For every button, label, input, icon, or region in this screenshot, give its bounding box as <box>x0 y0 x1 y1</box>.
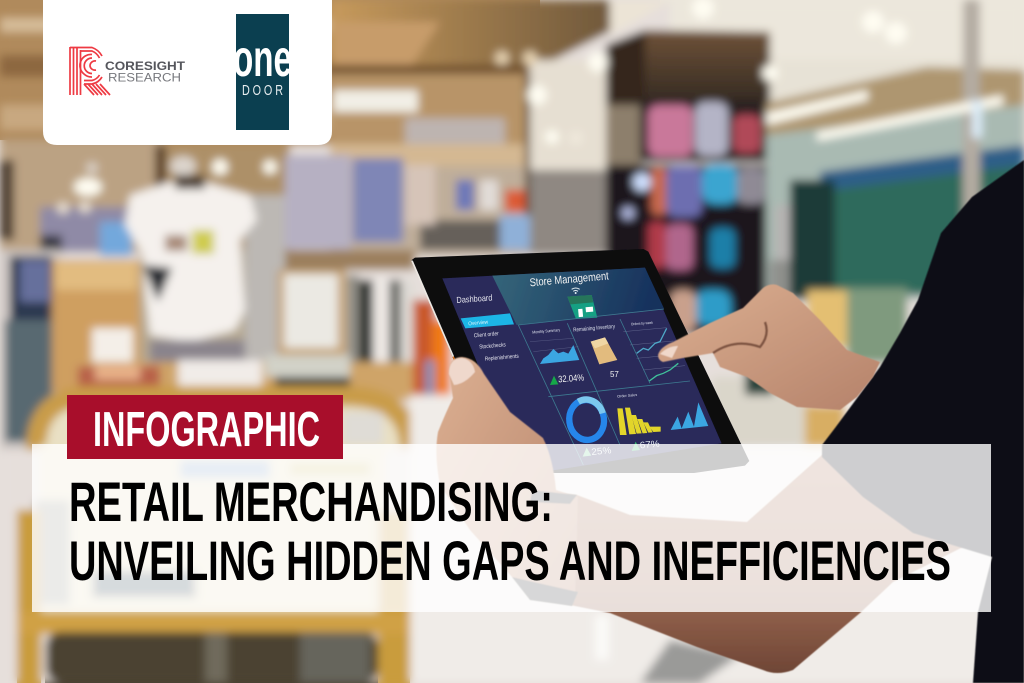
lower stats <box>583 439 660 457</box>
finger crease <box>713 322 767 353</box>
donut chart <box>567 398 607 442</box>
sidebar menu: Dashboard <box>456 292 493 305</box>
person: forearm and upper arm <box>535 440 992 673</box>
panel labels: Monthly Summary <box>532 327 560 335</box>
logo card <box>43 0 332 145</box>
left hand holding tablet <box>436 357 578 606</box>
wifi icon <box>572 288 580 293</box>
title heading <box>69 470 951 592</box>
blue peak chart <box>671 402 708 430</box>
panel labels <box>532 321 653 399</box>
tablet screen <box>442 268 722 475</box>
thumbnail <box>449 358 475 385</box>
store icon <box>567 295 597 319</box>
right hand pointing at tablet <box>658 284 880 410</box>
logo: Coresight Research: RESEARCH <box>108 72 181 84</box>
logo: One Door: one <box>233 30 292 88</box>
sidebar menu: Overview <box>468 320 489 327</box>
back wall with shelves <box>330 72 531 256</box>
dashboard grid lines <box>518 309 690 465</box>
area chart <box>530 338 579 364</box>
growth stat <box>550 373 584 385</box>
label: INFOGRAPHIC: INFOGRAPHIC <box>93 403 320 457</box>
shelving block with backpacks <box>606 30 776 395</box>
light strips and spots <box>57 0 1003 214</box>
logo: One Door: DOOR <box>242 81 286 98</box>
centre table <box>36 355 413 452</box>
title heading: RETAIL MERCHANDISING: <box>69 470 553 533</box>
right pale wall <box>530 0 1024 255</box>
logo: Coresight Research <box>70 47 185 95</box>
title panel: translucent white band <box>32 444 991 612</box>
tablet <box>412 249 749 493</box>
tablet body <box>412 249 749 493</box>
floor <box>410 377 1024 683</box>
sign on stand <box>278 270 346 356</box>
panel labels: Orders by week <box>631 321 653 326</box>
screen header <box>492 268 664 325</box>
line charts <box>623 328 685 381</box>
lower stats: 25% <box>591 445 612 457</box>
clothes rack <box>347 275 450 412</box>
top left ceiling <box>0 0 672 145</box>
label: INFOGRAPHIC <box>67 395 343 459</box>
left background shop <box>0 140 290 450</box>
sidebar menu <box>456 292 519 363</box>
sidebar menu: Client order <box>474 331 499 339</box>
logo: One Door <box>236 14 289 130</box>
yellow bar chart <box>617 408 661 435</box>
lower table <box>17 445 410 683</box>
sidebar menu: Replenishments <box>485 354 519 363</box>
right side of store <box>766 0 1024 447</box>
logo: Coresight Research: CORESIGHT <box>105 61 185 73</box>
lower stats: 67% <box>639 439 660 450</box>
panel labels: Order Sales <box>617 393 637 399</box>
panel labels: Remaining Inventory <box>573 324 615 334</box>
mannequin <box>125 156 290 370</box>
box icon <box>591 337 617 364</box>
wood display unit <box>52 260 140 392</box>
screen title: Store Management <box>529 270 610 289</box>
hanging shirts <box>285 155 435 270</box>
inventory number: 57 <box>610 370 619 379</box>
growth stat: 32.04% <box>558 373 584 384</box>
person: black shirt <box>822 160 1024 683</box>
sidebar menu: Stockchecks <box>479 342 506 351</box>
watch band <box>512 490 578 606</box>
